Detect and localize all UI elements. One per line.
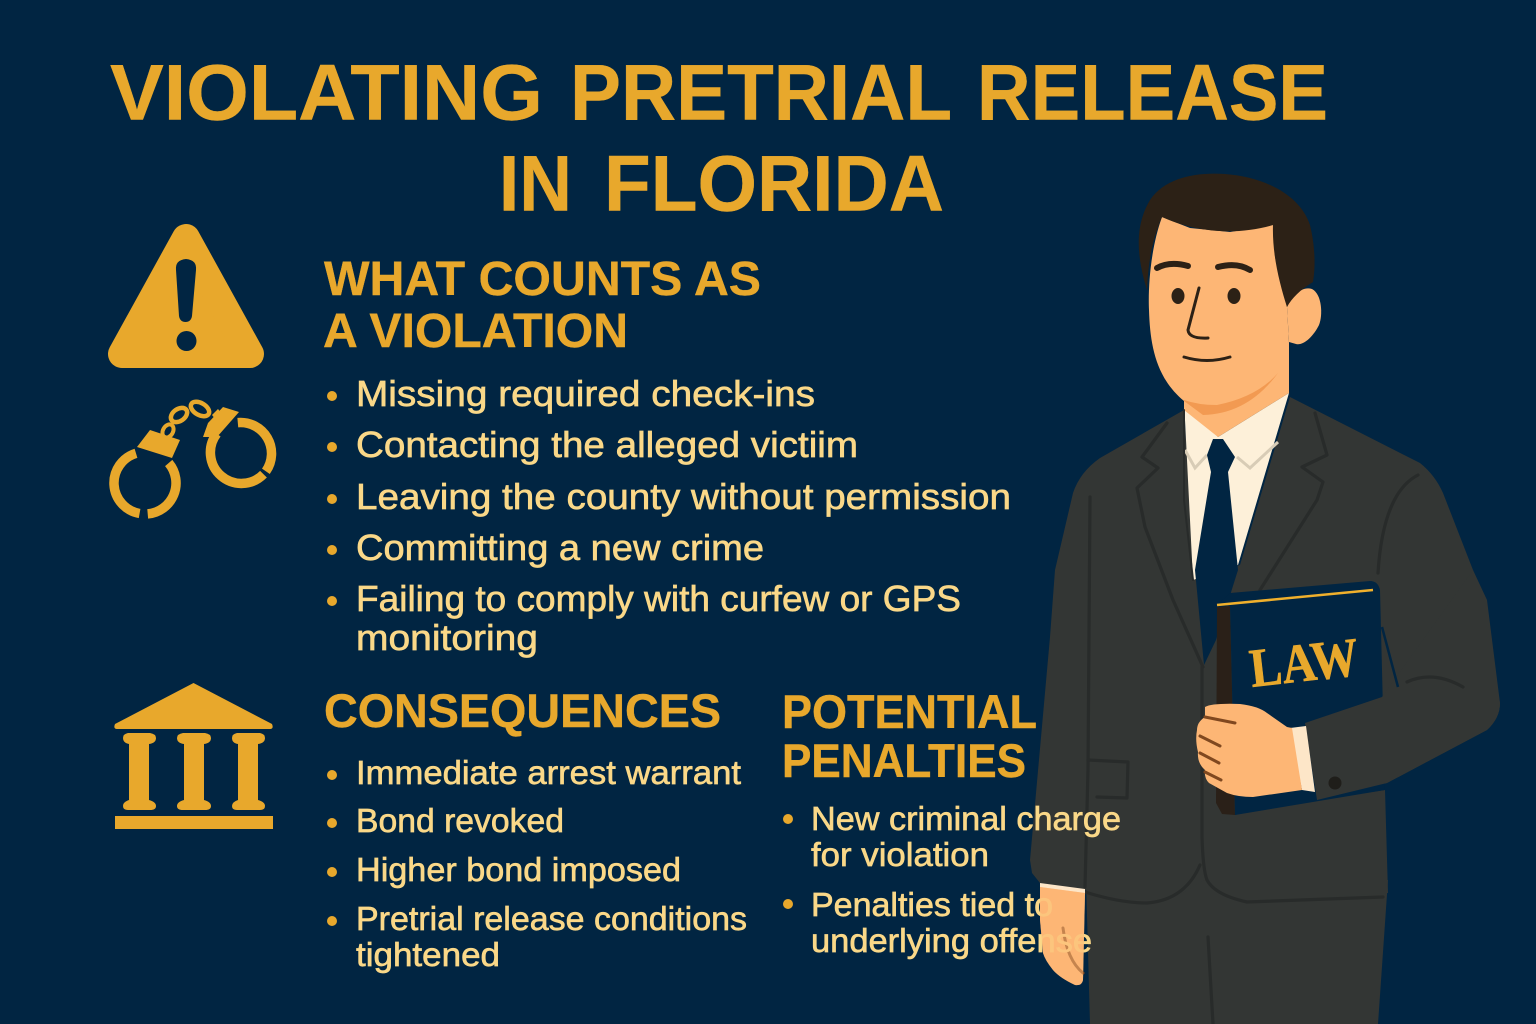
violation list: Contacting the alleged victiim — [356, 424, 858, 465]
title: RELEASE — [977, 48, 1328, 136]
title: VIOLATING — [110, 48, 543, 136]
collar shadows — [1185, 442, 1278, 468]
penalties list: underlying offense — [811, 922, 1092, 959]
consequences list: Higher bond imposed — [356, 851, 681, 888]
consequences list: Immediate arrest warrant — [356, 754, 741, 791]
title — [110, 48, 1328, 228]
shirt — [1184, 393, 1289, 580]
right hand — [1196, 704, 1302, 797]
consequences list — [327, 754, 747, 973]
title: PRETRIAL — [570, 48, 952, 136]
icon: warning triangle — [122, 238, 250, 354]
violation list: monitoring — [356, 617, 538, 658]
chin shadow — [1184, 373, 1278, 415]
consequences list: Pretrial release conditions — [356, 900, 747, 937]
panel: what counts as a violation — [323, 253, 1011, 658]
heading: what counts as a violation: WHAT COUNTS AS — [324, 253, 761, 306]
ear — [1287, 288, 1321, 344]
panel: consequences — [324, 684, 747, 973]
left hand overlay softening text — [1040, 887, 1085, 985]
penalties list: Penalties tied to — [811, 886, 1053, 923]
heading: potential penalties: PENALTIES — [782, 734, 1026, 787]
illustration: lawyer holding law book — [1030, 174, 1500, 1024]
consequences list: tightened — [356, 936, 500, 973]
consequences list: Bond revoked — [356, 802, 564, 839]
jacket seams — [1085, 410, 1418, 1024]
shirt cuff — [1290, 726, 1315, 792]
violation list — [327, 373, 1011, 658]
panel: potential penalties — [782, 685, 1121, 959]
hair — [1139, 174, 1315, 307]
title: FLORIDA — [604, 138, 944, 228]
facial features — [1157, 264, 1250, 360]
heading: what counts as a violation: A VIOLATION — [323, 305, 628, 358]
law book — [1216, 581, 1385, 815]
violation list: Failing to comply with curfew or GPS — [356, 578, 961, 619]
trousers — [1086, 880, 1388, 1024]
penalties list: New criminal charge — [811, 800, 1121, 837]
icon: handcuffs — [114, 399, 272, 514]
heading: what counts as a violation — [323, 253, 761, 358]
law book: LAW — [1246, 626, 1362, 699]
heading: potential penalties: POTENTIAL — [782, 685, 1037, 738]
penalties list: for violation — [811, 836, 989, 873]
left hand — [1040, 887, 1085, 985]
violation list: Leaving the county without permission — [356, 476, 1011, 517]
left shirt cuff — [1040, 883, 1085, 895]
heading: consequences: CONSEQUENCES — [324, 684, 721, 737]
neck and face — [1149, 217, 1289, 437]
violation list: Committing a new crime — [356, 527, 764, 568]
title: IN — [499, 138, 572, 228]
tie — [1195, 439, 1238, 665]
violation list: Missing required check-ins — [356, 373, 815, 414]
heading: potential penalties — [782, 685, 1037, 787]
jacket — [1030, 397, 1500, 903]
penalties list — [783, 800, 1121, 959]
icon: courthouse — [114, 683, 273, 829]
right sleeve — [1305, 570, 1500, 800]
